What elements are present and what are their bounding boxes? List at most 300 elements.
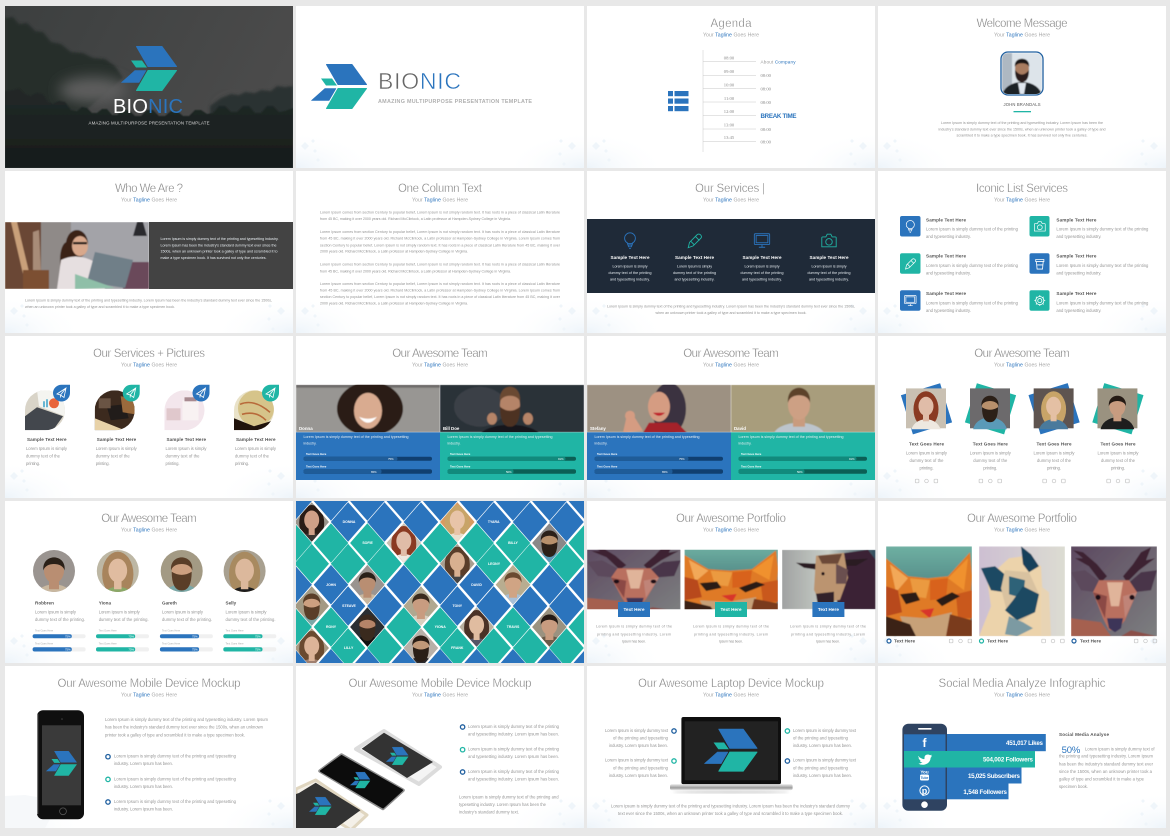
service: desk picture: dummy text of the [96, 453, 130, 458]
member: Gareth: Text Goes Here [162, 642, 181, 646]
title: Social Media Analyze Infographic [938, 678, 1106, 690]
analysis text: galley of type and scrambled it to make a type [1059, 777, 1145, 782]
portfolio item: deer: printing and typesetting industry. Lorem [597, 632, 671, 636]
slide: one column text [296, 171, 584, 333]
title: One Column Text [398, 183, 483, 195]
message text: Lorem Ipsum is simply dummy text of the printing and typesetting industry. Lorem Ipsum has been the [941, 121, 1103, 125]
title: Our Awesome Mobile Device Mockup [58, 678, 240, 690]
service 1 text: and typesetting industry. [610, 278, 650, 282]
right text 1: of the printing and typesetting [793, 736, 849, 741]
portfolio item: dog [979, 546, 1065, 644]
left text 2: of the printing and typesetting [613, 765, 669, 770]
title: Our Awesome Team [101, 513, 197, 525]
names: LILLY [344, 646, 354, 650]
tagline: Your Tagline Goes Here [121, 362, 177, 368]
dark text panel: Lorem Ipsum has been the industry's standard dummy text ever since the [160, 243, 276, 247]
member 2: Lorem Ipsum is simply [970, 450, 1012, 455]
left text 1: industry. Lorem Ipsum has been. [609, 743, 668, 748]
service: jars picture [164, 385, 210, 466]
title: Our Services + Pictures [93, 348, 205, 360]
title: Our Awesome Laptop Device Mockup [638, 678, 824, 690]
member: Selly: Text Goes Here [226, 642, 244, 646]
member: Bill Doe: Text Goes Here [450, 464, 471, 468]
analysis text: specimen book. [1059, 784, 1088, 789]
service 1 text: dummy text of the printing [608, 271, 652, 275]
member: David: Text Goes Here [741, 452, 762, 456]
member: Bill Doe: 91% [558, 457, 564, 461]
names: STEAVE [342, 604, 357, 608]
service 3 text: and typesetting industry. [742, 278, 782, 282]
right text 1: Lorem Ipsum is simply dummy text [793, 728, 857, 733]
tagline: Your Tagline Goes Here [412, 692, 468, 698]
left text 2: Lorem Ipsum is simply dummy text [605, 758, 669, 763]
tagline: Your Tagline Goes Here [121, 692, 177, 698]
right text 2: of the printing and typesetting [793, 765, 849, 770]
member 4 [1092, 383, 1144, 483]
member: Yiona [93, 548, 149, 652]
names: TRAVIS [507, 625, 520, 629]
service: globe picture [234, 385, 279, 466]
names: LEONY [488, 562, 501, 566]
member 4: Lorem Ipsum is simply [1098, 450, 1139, 455]
bullet 3 [106, 799, 237, 811]
member: Gareth: dummy text of the printing. [162, 617, 212, 622]
portfolio item: bull [782, 550, 876, 643]
icon: youtube: You [920, 770, 929, 774]
service: jars picture: printing. [166, 461, 180, 466]
dark text panel [149, 222, 293, 289]
service: laptop picture: printing. [26, 461, 40, 466]
tagline: Your Tagline Goes Here [703, 362, 759, 368]
item: bulb: Sample Text Here [926, 218, 966, 222]
service 4 text: dummy text of the printing [808, 271, 850, 275]
member 4: Text Goes Here [1100, 442, 1136, 446]
member: Donna [296, 382, 440, 480]
slide: who we are [5, 171, 293, 333]
body text: Lorem Ipsum comes from section Century to popular belief, Lorem Ipsum is not simply random text. It has roots in a piece of classical Latin literature [320, 263, 560, 267]
title: Our Services | [695, 183, 765, 195]
forest photo background [5, 6, 293, 168]
names: DONNA [343, 520, 356, 524]
bar chart [947, 734, 1046, 799]
body text: Lorem Ipsum is simply dummy text of the printing and typesetting industry. Lorem Ipsum has been the industry's standard dummy text ever since the 1500s, [25, 299, 272, 303]
body text: Lorem Ipsum is simply dummy text of the printing and typesetting industry. Lorem Ipsum has been the industry's standard dummy text ever since the 1500s, [607, 305, 855, 309]
service 2 text: and typesetting industry. [674, 278, 714, 282]
member: Robbren: Lorem Ipsum is simply [35, 609, 77, 614]
body text: when an unknown printer took a galley of type and scrambled it to make a type specimen book. [656, 311, 806, 315]
closing text: industry's standard dummy text. [459, 810, 519, 815]
bullet 1: Lorem Ipsum is simply dummy text of the printing [468, 724, 560, 729]
service 2 text [673, 255, 716, 282]
item: bulb: and typesetting industry. [926, 234, 971, 239]
dark text panel: make a type specimen book. It has survived not only five centuries. [160, 256, 266, 260]
tagline: Your Tagline Goes Here [703, 528, 759, 534]
portfolio item: cat: Text Here [720, 607, 742, 612]
member: Robbren: 75% [65, 648, 71, 652]
member: Gareth [157, 548, 213, 652]
service: laptop picture [25, 385, 70, 466]
member: Bill Doe [440, 385, 584, 480]
bullet 3: Lorem Ipsum is simply dummy text of the printing and typesetting [114, 799, 237, 804]
names [326, 520, 520, 650]
name: JOHN BRANDALS [1004, 102, 1041, 107]
bullet 3: and typesetting industry. Lorem Ipsum has been. [468, 776, 559, 781]
tagline: Your Tagline Goes Here [703, 32, 759, 38]
member 1: dummy text of the [910, 458, 944, 463]
portfolio item: dog: Text Here [987, 639, 1008, 644]
bullet 3: industry. Lorem Ipsum has been. [114, 806, 173, 811]
intro text: has been the industry's standard dummy text ever since the 1500s, when an unknown [105, 725, 264, 730]
member: David: industry. [738, 441, 752, 445]
slide: our services 1 [587, 171, 875, 333]
service 4 text: and typesetting industry. [809, 278, 849, 282]
member 1: printing. [920, 465, 934, 470]
member 3: Text Goes Here [1036, 442, 1072, 446]
bar chart: 1,548 Followers [963, 789, 1008, 796]
names: JOHN [326, 583, 336, 587]
member: Bill Doe: Text Goes Here [450, 452, 471, 456]
service: jars picture: Sample Text Here [166, 437, 206, 442]
subtitle: AMAZING MULTIPURPOSE PRESENTATION TEMPLATE [378, 99, 532, 105]
portfolio item: deer [1071, 546, 1157, 644]
title: Our Awesome Portfolio [967, 513, 1077, 525]
slide: iconic list services [878, 171, 1166, 333]
names: RONY [326, 625, 337, 629]
item: camera: and typesetting industry. [1056, 234, 1101, 239]
timeline: 13:45 [724, 135, 735, 140]
title: Iconic List Services [976, 183, 1068, 195]
item: cup: and typesetting industry. [1056, 270, 1101, 276]
right text 1 [785, 728, 857, 748]
portfolio item: cat: Ipsum has been. [719, 639, 743, 643]
portfolio item: deer: Text Here [624, 607, 645, 612]
left text 2: industry. Lorem Ipsum has been. [609, 773, 668, 778]
underline [1014, 111, 1031, 112]
logo [312, 64, 366, 108]
title: Our Awesome Portfolio [676, 513, 786, 525]
tagline: Your Tagline Goes Here [703, 198, 759, 204]
member: Donna: industry. [304, 441, 316, 445]
icon: pencil [688, 234, 701, 248]
photo diamonds [296, 502, 567, 663]
timeline: 08:00 [760, 73, 772, 78]
tagline: Your Tagline Goes Here [121, 528, 177, 534]
item: gear [1030, 290, 1149, 313]
member: Selly: Selly [226, 600, 237, 606]
service: desk picture: Lorem Ipsum is simply [96, 446, 138, 451]
member: Selly: 75% [255, 648, 261, 652]
member 3: printing. [1047, 465, 1061, 470]
member: Yiona: 75% [128, 648, 135, 652]
timeline: 13:00 [724, 122, 735, 128]
portfolio item: bull: Ipsum has been. [816, 639, 840, 643]
body text: Lorem Ipsum comes from section Century to popular belief, Lorem Ipsum is not simply random text. It has roots in a piece of classical Latin literature [320, 230, 560, 234]
bullet 2 [460, 747, 560, 759]
message text [938, 121, 1106, 138]
analysis text: since the 1500s, when an unknown printer took a [1059, 769, 1153, 774]
title: Our Awesome Mobile Device Mockup [348, 678, 532, 690]
member: Donna: Text Goes Here [306, 452, 327, 456]
timeline: 12:00 [724, 109, 735, 114]
member: Gareth: Gareth [162, 600, 177, 606]
icon: list [668, 91, 688, 111]
member: David: 91% [849, 457, 855, 461]
service 1 text: Sample Text Here [610, 255, 650, 260]
bullet 1 [106, 753, 237, 766]
item: pencil: Sample Text Here [926, 254, 966, 258]
slide: team with tilted frames [878, 336, 1166, 498]
service: jars picture: dummy text of the [166, 453, 200, 458]
service 2 text: dummy text of the printing [673, 271, 716, 275]
member: Selly: dummy text of the printing. [226, 617, 276, 622]
title: Who We Are ? [115, 183, 183, 195]
item: camera: Sample Text Here [1056, 218, 1097, 222]
percentage stat: 50% [1062, 745, 1081, 756]
closing text [459, 795, 559, 815]
body text: 2000 years old. Richard McClintock, a Latin professor at Hampden-Sydney College in Virginia. [320, 250, 468, 254]
service: jars picture: Lorem Ipsum is simply [166, 446, 207, 451]
slide: agenda [587, 6, 875, 168]
item: cup: Lorem Ipsum is simply dummy text of the printing [1056, 263, 1149, 268]
member: Gareth: 75% [192, 648, 198, 652]
member: Robbren [29, 548, 86, 652]
bullet 2 [106, 776, 237, 789]
bullet 3 [460, 769, 560, 781]
icon: facebook: f [922, 736, 928, 750]
bullet 1: Lorem Ipsum is simply dummy text of the printing and typesetting [114, 753, 237, 758]
portfolio item: deer: Ipsum has been. [622, 639, 646, 643]
body text: from 45 BC, making it over 2000 years old. Richard McClintock, a Latin professor at Hampden-Sydney College in Virginia. [320, 217, 511, 221]
slide: our services and pictures [5, 336, 293, 498]
portfolio item: cat: printing and typesetting industry. Lorem [694, 632, 768, 636]
names: TYARA [488, 520, 500, 524]
portfolio item: bull: Lorem Ipsum is simply dummy text of the [790, 625, 866, 629]
body text [320, 211, 561, 306]
timeline: 10:00 [724, 82, 735, 88]
logo [122, 46, 176, 90]
member: Selly: 75% [255, 634, 261, 638]
member: Yiona: Yiona [99, 600, 111, 606]
timeline: 08:00 [760, 140, 772, 144]
member: Yiona: Text Goes Here [99, 628, 117, 632]
title: Our Awesome Team [392, 348, 488, 360]
bullet 2: and typesetting industry. Lorem Ipsum has been. [468, 754, 559, 759]
member: Bill Doe: Bill Doe [443, 426, 460, 431]
closing text: typesetting industry. Lorem Ipsum has been the [459, 802, 547, 807]
dark services band [587, 219, 875, 293]
member: Bill Doe: Lorem Ipsum is simply dummy text of the printing and typesetting [448, 435, 552, 439]
member: David: Lorem Ipsum is simply dummy text of the printing and typesetting [738, 435, 844, 439]
slide: social media analyze infographic [878, 666, 1166, 828]
slide: welcome message [878, 6, 1166, 168]
member 1 [901, 383, 952, 483]
item: camera [1030, 216, 1149, 239]
member: David [731, 385, 875, 480]
member: Yiona: Lorem Ipsum is simply [99, 609, 141, 614]
icon: monitor [754, 234, 770, 247]
slide: team with circular photos [5, 501, 293, 663]
body text: Lorem Ipsum comes from section Century to popular belief, Lorem Ipsum is not simply random text. It has roots in a piece of classical Latin literature [320, 211, 560, 215]
portfolio item: bull: Text Here [818, 607, 839, 612]
names: YIONA [435, 625, 446, 629]
service: laptop picture: Lorem Ipsum is simply [26, 446, 68, 451]
icon: youtube: Tube [921, 776, 929, 780]
member: Yiona: 75% [128, 634, 135, 638]
timeline: 08:00 [724, 56, 735, 60]
service 1 text [608, 255, 652, 282]
service: globe picture: printing. [235, 461, 249, 466]
slide: team with large photos 1 [296, 336, 584, 498]
title: Our Awesome Team [974, 348, 1070, 360]
names: BILLY [508, 541, 519, 545]
diamond tiles [296, 501, 584, 663]
member 4: dummy text of the [1101, 458, 1136, 463]
photo: woman with laptop [5, 222, 149, 289]
service: laptop picture: Sample Text Here [27, 437, 67, 442]
portrait [1000, 51, 1044, 96]
item: monitor: and typesetting industry. [926, 308, 971, 313]
slide: team with large photos 2 [587, 336, 875, 498]
portfolio item: deer [587, 542, 681, 643]
member 2: dummy text of the [973, 458, 1008, 463]
wordmark: BIONIC [378, 68, 461, 94]
slide: diamond team mosaic [296, 501, 584, 663]
timeline: 08:00 [760, 86, 772, 92]
left text 1 [605, 728, 676, 748]
icon: youtube [920, 770, 929, 780]
member 1: Lorem Ipsum is simply [906, 450, 948, 455]
bar chart: 15,025 Subscribers [968, 773, 1021, 780]
timeline: 11:00 [724, 96, 735, 101]
member: Robbren: dummy text of the printing. [35, 617, 85, 622]
timeline: 08:00 [760, 100, 772, 105]
member: Donna: Donna [299, 426, 313, 431]
dark text panel: 1500s, when an unknown printer took a galley of type and scrambled it to [160, 250, 278, 254]
member: Stefany: Text Goes Here [597, 452, 618, 456]
body text [25, 299, 272, 309]
analysis heading: Social Media Analyse [1059, 732, 1109, 737]
gold phone [296, 780, 367, 830]
member: Donna: Lorem Ipsum is simply dummy text of the printing and typesetting [304, 435, 408, 439]
left text 1: Lorem Ipsum is simply dummy text [605, 728, 669, 733]
bullet 2: industry. Lorem Ipsum has been. [114, 784, 173, 789]
slide: mobile mockup isometric [296, 666, 584, 830]
icon: pinterest: p [922, 786, 928, 796]
phone with social icons [902, 724, 947, 811]
member: Stefany [587, 383, 731, 480]
service 3 text [740, 255, 784, 282]
item: gear: and typesetting industry. [1056, 308, 1101, 313]
member: Stefany: Text Goes Here [597, 464, 618, 468]
intro text: Lorem Ipsum is simply dummy text of the printing and typesetting industry. Lorem Ipsum [105, 717, 268, 722]
service: globe picture: Sample Text Here [236, 437, 276, 442]
body text: Lorem Ipsum comes from section Century to popular belief, Lorem Ipsum is not simply random text. It has roots in a piece of classical Latin literature [320, 282, 560, 286]
slide: portfolio with captions [587, 501, 876, 663]
body text: from 45 BC, making it over 2000 years old. Richard McClintock, a Latin professor at Hampden-Sydney College in Virginia. Lorem Ipsum comes from [320, 289, 560, 293]
service: desk picture: Sample Text Here [97, 437, 137, 442]
service 3 text: Sample Text Here [742, 255, 782, 260]
analysis text: has been the industry's standard dummy text ever [1059, 761, 1154, 766]
slide: mobile mockup single [5, 666, 293, 828]
analysis text [1059, 746, 1155, 789]
tagline: Your Tagline Goes Here [994, 198, 1050, 204]
names: TONY [452, 604, 463, 608]
item: bulb: Lorem Ipsum is simply dummy text of the printing [926, 227, 1019, 232]
item: monitor [900, 290, 1019, 313]
member: Stefany: Lorem Ipsum is simply dummy text of the printing and typesetting [594, 435, 700, 439]
bar chart: 451,017 Likes [1006, 740, 1044, 747]
intro text [105, 717, 268, 737]
service 4 text: Sample Text Here [810, 255, 849, 260]
tagline: Your Tagline Goes Here [412, 198, 468, 204]
service: desk picture: printing. [96, 461, 110, 466]
body text: 2000 years old. Richard McClintock, a Latin professor at Hampden-Sydney College in Virginia. [320, 302, 468, 306]
analysis text: the printing and typesetting industry. Lorem Ipsum [1059, 754, 1154, 759]
member: Yiona: Text Goes Here [99, 642, 117, 646]
item: gear: Lorem Ipsum is simply dummy text of the printing [1056, 300, 1149, 306]
service: laptop picture: dummy text of the [26, 453, 61, 458]
body text: from 45 BC, making it over 2000 years old. Richard McClintock, a Latin professor at Hampden-Sydney College in Virginia. [320, 269, 511, 273]
member: David: 50% [797, 470, 803, 474]
item: bulb [900, 216, 1019, 239]
member: David: David [734, 426, 746, 431]
member: Stefany: 65% [662, 470, 668, 474]
timeline [703, 50, 796, 152]
member: Selly: Text Goes Here [226, 628, 244, 632]
closing text: Lorem Ipsum is simply dummy text of the printing and [459, 795, 559, 800]
member 4: printing. [1111, 465, 1125, 470]
icon: camera [822, 234, 836, 247]
slide: logo title [296, 6, 584, 168]
analysis text: Lorem Ipsum is simply dummy text of [1085, 746, 1155, 751]
bullet 1 [460, 724, 560, 737]
right text 2 [785, 758, 857, 778]
names: FRANK [451, 646, 464, 650]
member 3: Lorem Ipsum is simply [1034, 450, 1075, 455]
service 3 text: Lorem Ipsum is simply [744, 265, 780, 269]
timeline: 09:00 [724, 69, 735, 74]
bottom text: Lorem Ipsum is simply dummy text of the printing and typesetting industry. Lorem Ipsum has been the industry's standard dummy [611, 803, 851, 808]
member: Gareth: Text Goes Here [162, 628, 181, 632]
portfolio item: bull: printing and typesetting industry. Lorem [791, 632, 865, 636]
slide: cover with forest [5, 6, 293, 168]
tagline: Your Tagline Goes Here [994, 32, 1050, 38]
body text: section Century to popular belief, Lorem Ipsum is not simply random text. It has roots in a piece of classical Latin literature from 45 BC, making it over [320, 243, 561, 247]
item: monitor: Lorem Ipsum is simply dummy text of the printing [926, 300, 1019, 306]
phone mockup [37, 710, 84, 819]
service 2 text: Lorem Ipsum is simply [677, 265, 712, 269]
wordmark: BIONIC [113, 96, 185, 118]
service 3 text: dummy text of the printing [740, 271, 784, 275]
member 1: Text Goes Here [909, 442, 944, 446]
black phone [320, 755, 403, 808]
member: Stefany: Stefany [590, 426, 606, 431]
member: David: Text Goes Here [741, 464, 762, 468]
body text: from 45 BC, making it over 2000 years old. Richard McClintock, a Latin professor at Hampden-Sydney College in Virginia. Lorem Ipsum comes from [320, 237, 560, 241]
member: Yiona: dummy text of the printing. [99, 617, 149, 622]
bottom text: text ever since the 1500s, when an unknown printer took a galley of type and scrambled it to make a type specimen book. [618, 811, 843, 816]
item: monitor: Sample Text Here [926, 291, 966, 296]
portfolio item: cat: Text Here [894, 639, 915, 644]
laptop [670, 717, 793, 793]
right text 2: Lorem Ipsum is simply dummy text [793, 758, 857, 763]
member: Bill Doe: 50% [506, 470, 512, 474]
service: globe picture: Lorem Ipsum is simply [235, 446, 277, 451]
message text: industry's standard dummy text ever since the 1500s, when an unknown printer took a galley of type and [938, 127, 1106, 131]
item: cup [1030, 253, 1149, 276]
icon: bulb [625, 233, 635, 249]
slide: laptop mockup [587, 666, 875, 828]
